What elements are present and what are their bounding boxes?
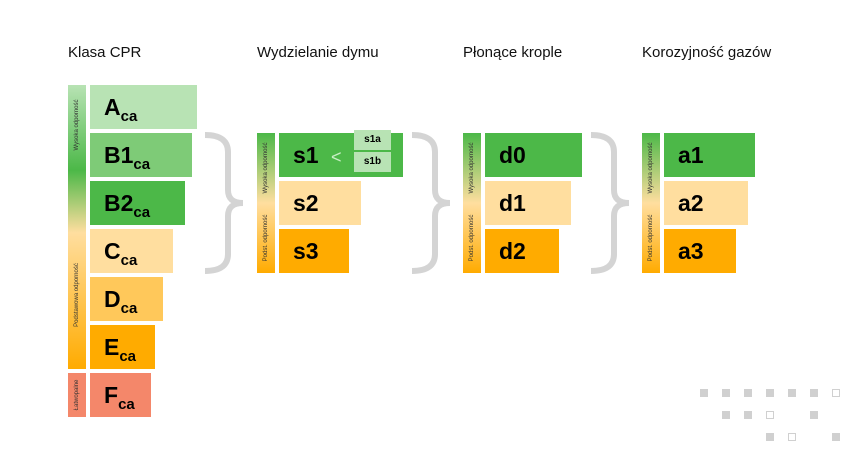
- box: s1: [279, 133, 403, 177]
- box: s2: [279, 181, 361, 225]
- box: s2: s2: [293, 190, 319, 216]
- panel: droplets: [463, 133, 582, 273]
- title: Płonące krople: Płonące krople: [463, 44, 562, 61]
- brace 3: [591, 135, 629, 271]
- box: Dca: Dca: [104, 286, 137, 317]
- box: Eca: Eca: [104, 334, 136, 365]
- scale bar: resistance: [68, 85, 86, 369]
- box: Cca: [90, 229, 173, 273]
- brace 2: [412, 135, 450, 271]
- title: Klasa CPR: Klasa CPR: [68, 44, 141, 61]
- scale bar: Podst. odporność: [648, 215, 654, 261]
- scale bar: Wysoka odporność: [469, 143, 475, 193]
- box: B2ca: [90, 181, 185, 225]
- box: d2: [485, 229, 559, 273]
- box: s1b: [354, 152, 391, 172]
- title: Korozyjność gazów: Korozyjność gazów: [642, 44, 771, 61]
- box: a3: [664, 229, 736, 273]
- box: d1: d1: [499, 190, 526, 216]
- scale bar: flammable: Łatwopalne: [74, 380, 80, 410]
- box: Aca: [90, 85, 197, 129]
- scale bar: [642, 133, 660, 273]
- box: d0: d0: [499, 142, 526, 168]
- box: s1a: s1a: [364, 134, 381, 145]
- scale bar: Podst. odporność: [469, 215, 475, 261]
- panel: corrosivity: [642, 133, 755, 273]
- decoration: squares pattern: [700, 389, 840, 441]
- box: s1: s1 <: [293, 142, 342, 168]
- box: a1: a1: [678, 142, 704, 168]
- box: s1a: [354, 130, 391, 150]
- scale bar: resistance: Wysoka odporność: [74, 100, 80, 150]
- box: B1ca: B1ca: [104, 142, 150, 173]
- box: Fca: [90, 373, 151, 417]
- scale bar: [463, 133, 481, 273]
- box: Eca: [90, 325, 155, 369]
- box: Aca: Aca: [104, 94, 137, 125]
- title: Wydzielanie dymu: Wydzielanie dymu: [257, 44, 379, 61]
- box: d1: [485, 181, 571, 225]
- panel: CPR classes: [68, 85, 197, 417]
- box: Fca: Fca: [104, 382, 135, 413]
- scale bar: Wysoka odporność: [263, 143, 269, 193]
- box: a1: [664, 133, 755, 177]
- scale bar: [257, 133, 275, 273]
- panel: smoke: [257, 130, 403, 273]
- brace 1: [205, 135, 243, 271]
- box: a2: [664, 181, 748, 225]
- box: a3: a3: [678, 238, 704, 264]
- box: Cca: Cca: [104, 238, 137, 269]
- box: B2ca: B2ca: [104, 190, 150, 221]
- box: a2: a2: [678, 190, 704, 216]
- box: s3: [279, 229, 349, 273]
- box: B1ca: [90, 133, 192, 177]
- box: d2: d2: [499, 238, 526, 264]
- box: s3: s3: [293, 238, 319, 264]
- scale bar: Podst. odporność: [263, 215, 269, 261]
- box: d0: [485, 133, 582, 177]
- box: s1b: s1b: [364, 156, 381, 167]
- scale bar: flammable: [68, 373, 86, 417]
- box: Dca: [90, 277, 163, 321]
- scale bar: Wysoka odporność: [648, 143, 654, 193]
- scale bar: resistance: Podstawowa odporność: [74, 263, 80, 327]
